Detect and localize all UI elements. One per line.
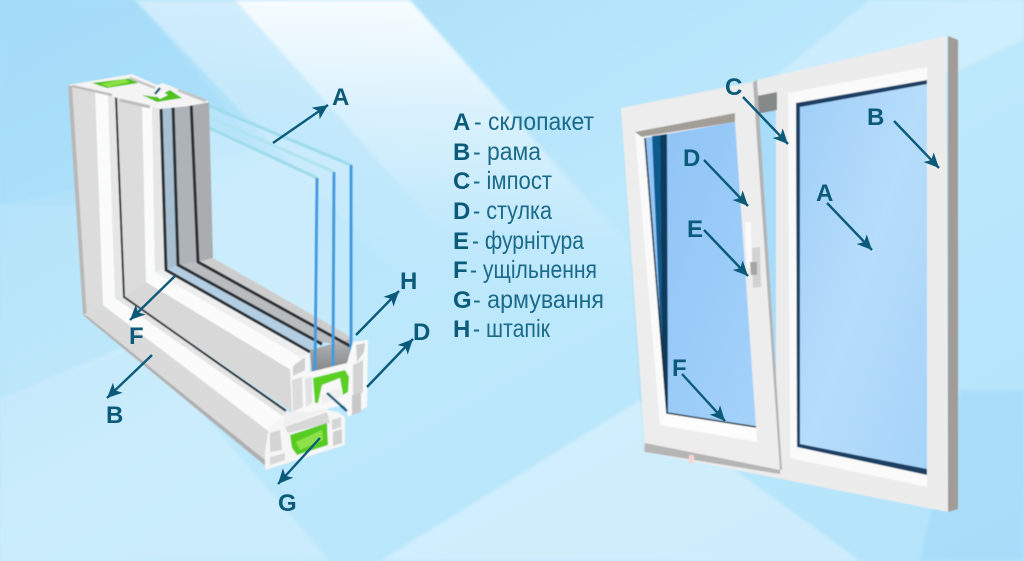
legend row D: - стулка bbox=[473, 197, 552, 225]
label F: F bbox=[129, 323, 144, 350]
mullion gap bbox=[755, 110, 776, 385]
left labels and arrows bbox=[106, 84, 430, 517]
legend row H: H bbox=[453, 316, 470, 343]
label A: A bbox=[332, 84, 349, 111]
arrow E bbox=[704, 230, 748, 276]
legend row H: - штапік bbox=[473, 315, 551, 343]
right side edge bbox=[948, 36, 958, 512]
profile: window frame cross-section bbox=[68, 74, 368, 470]
handle bbox=[745, 222, 761, 288]
window illustration bbox=[621, 36, 958, 512]
glass blue edges bbox=[315, 165, 351, 372]
frame faces bbox=[68, 85, 353, 468]
legend row C: - імпост bbox=[473, 167, 552, 195]
legend row A: A bbox=[453, 109, 470, 136]
arrow C bbox=[743, 97, 788, 144]
legend row A: - склопакет bbox=[474, 108, 594, 136]
legend row B: B bbox=[453, 139, 470, 166]
glass panes bbox=[160, 96, 351, 370]
label H: H bbox=[400, 268, 417, 295]
arrow B bbox=[107, 355, 152, 398]
label D: D bbox=[413, 319, 430, 346]
legend row C: C bbox=[453, 168, 470, 195]
legend row E: E bbox=[453, 228, 469, 255]
arrow A bbox=[273, 105, 328, 143]
main frame bbox=[645, 36, 948, 512]
label D: D bbox=[683, 145, 700, 172]
label A: A bbox=[816, 180, 833, 207]
ventilation slot bbox=[757, 92, 777, 114]
label E: E bbox=[687, 216, 703, 243]
sash glass bbox=[645, 122, 756, 427]
legend row F: F bbox=[453, 257, 468, 284]
arrow G bbox=[278, 438, 320, 484]
legend row F: - ущільнення bbox=[470, 256, 597, 284]
label F: F bbox=[672, 355, 687, 382]
legend row D: D bbox=[453, 198, 470, 225]
arrow D bbox=[367, 339, 413, 387]
legend bbox=[453, 108, 604, 343]
arrow F bbox=[130, 276, 175, 320]
top cross-section bbox=[68, 74, 210, 109]
lower sill bbox=[83, 305, 275, 468]
label B: B bbox=[106, 402, 123, 429]
label C: C bbox=[725, 74, 742, 101]
label B: B bbox=[867, 104, 884, 131]
arrow H bbox=[356, 291, 399, 335]
arrow F bbox=[682, 374, 725, 421]
legend row E: - фурнітура bbox=[472, 227, 584, 255]
upper section: sash profile bbox=[275, 340, 368, 430]
seals bbox=[116, 97, 350, 411]
arrow A bbox=[827, 203, 872, 250]
fixed pane glass bbox=[788, 67, 927, 487]
lower section: frame profile bbox=[265, 410, 345, 470]
label G: G bbox=[278, 490, 297, 517]
legend row B: - рама bbox=[473, 138, 541, 166]
legend row G: G bbox=[453, 287, 472, 314]
pink mark bbox=[689, 455, 694, 463]
window labels and arrows bbox=[672, 74, 939, 421]
arrow D bbox=[704, 160, 748, 206]
sash bbox=[621, 80, 782, 474]
arrow B bbox=[894, 121, 939, 168]
legend row G: - армування bbox=[473, 286, 604, 314]
